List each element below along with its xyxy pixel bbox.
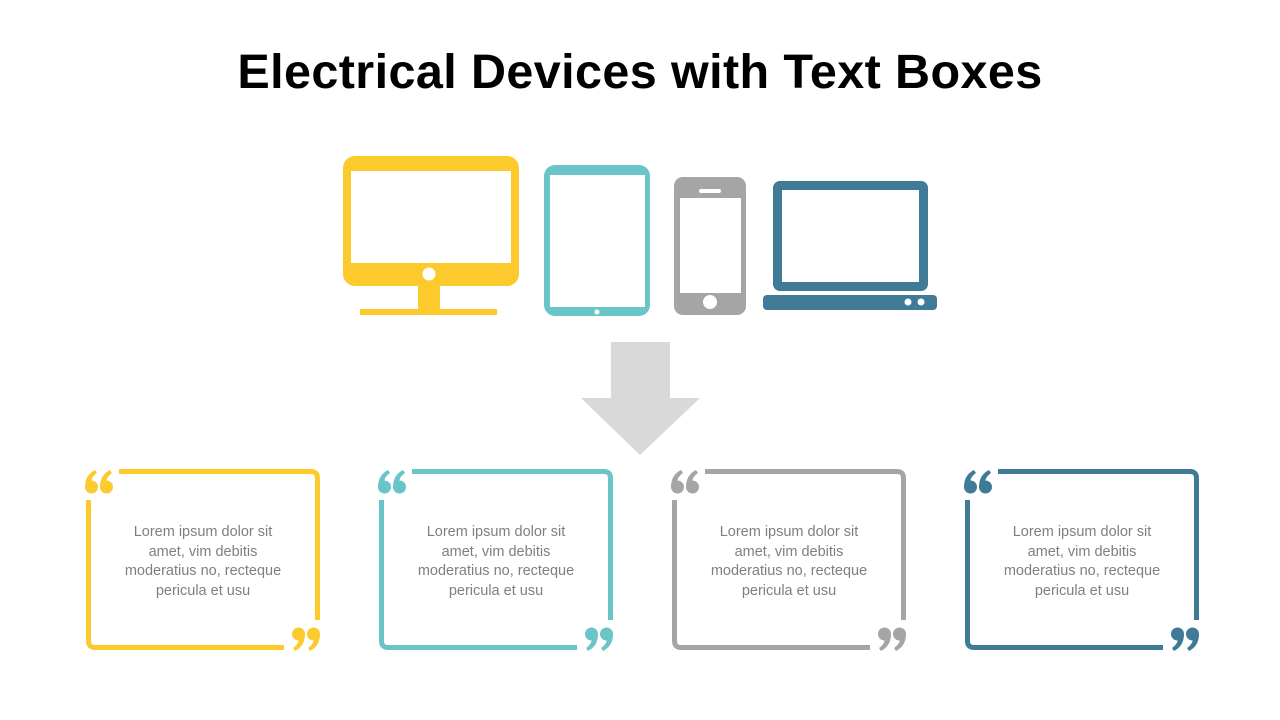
icon: tablet bbox=[544, 165, 650, 316]
text block 2 bbox=[418, 524, 574, 598]
icon: laptop bbox=[763, 181, 937, 310]
text block 4: moderatius no, recteque bbox=[1004, 563, 1160, 579]
text block 4: pericula et usu bbox=[1035, 582, 1129, 598]
text block 4 bbox=[1004, 524, 1160, 598]
icon: monitor bbox=[343, 156, 519, 315]
text block 1: Lorem ipsum dolor sit bbox=[134, 524, 272, 540]
text block 2: Lorem ipsum dolor sit bbox=[427, 524, 565, 540]
frame: blue bbox=[964, 470, 1199, 651]
text block 4: amet, vim debitis bbox=[1028, 544, 1136, 560]
text block 3: moderatius no, recteque bbox=[711, 563, 867, 579]
frame: yellow bbox=[85, 470, 320, 651]
text block 1: pericula et usu bbox=[156, 582, 250, 598]
text block 2: amet, vim debitis bbox=[442, 544, 550, 560]
text block 1 bbox=[125, 524, 281, 598]
text block 3: Lorem ipsum dolor sit bbox=[720, 524, 858, 540]
text block 3: amet, vim debitis bbox=[735, 544, 843, 560]
text block 2: pericula et usu bbox=[449, 582, 543, 598]
arrow: down bbox=[581, 342, 700, 455]
text block 4: Lorem ipsum dolor sit bbox=[1013, 524, 1151, 540]
frame: gray bbox=[671, 470, 906, 651]
text block 2: moderatius no, recteque bbox=[418, 563, 574, 579]
text block 3 bbox=[711, 524, 867, 598]
frame: teal bbox=[378, 470, 613, 651]
text block 1: amet, vim debitis bbox=[149, 544, 257, 560]
text block 3: pericula et usu bbox=[742, 582, 836, 598]
icon: phone bbox=[674, 177, 746, 315]
title: Electrical Devices with Text Boxes bbox=[237, 45, 1043, 99]
text block 1: moderatius no, recteque bbox=[125, 563, 281, 579]
